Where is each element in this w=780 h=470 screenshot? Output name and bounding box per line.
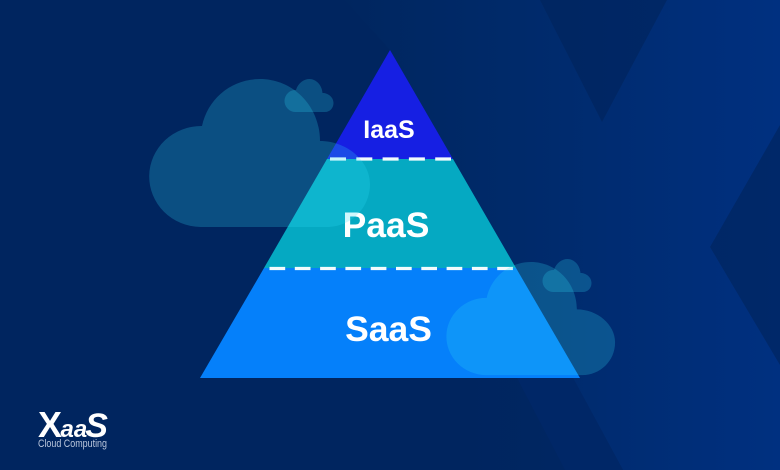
- cloud: large right: [446, 262, 615, 375]
- logo tagline: Cloud Computing: [38, 438, 107, 450]
- cloud: large left: [149, 79, 370, 227]
- label: IaaS: IaaS: [363, 116, 415, 144]
- logo: [38, 404, 108, 450]
- tier: SaaS: [200, 268, 580, 378]
- background X faint lower band: [517, 378, 623, 470]
- background X mark: [345, 0, 780, 470]
- dashed divider upper: [330, 157, 451, 161]
- pyramid: [200, 50, 580, 378]
- cloud: small left: [284, 79, 334, 112]
- dashed divider lower: [270, 267, 513, 270]
- cloud: small right: [542, 259, 592, 292]
- tier: IaaS: [327, 50, 453, 159]
- label: SaaS: SaaS: [345, 309, 432, 349]
- tier: PaaS: [264, 159, 516, 268]
- label: PaaS: PaaS: [343, 205, 429, 245]
- logo wordmark: XaaS: [38, 404, 108, 445]
